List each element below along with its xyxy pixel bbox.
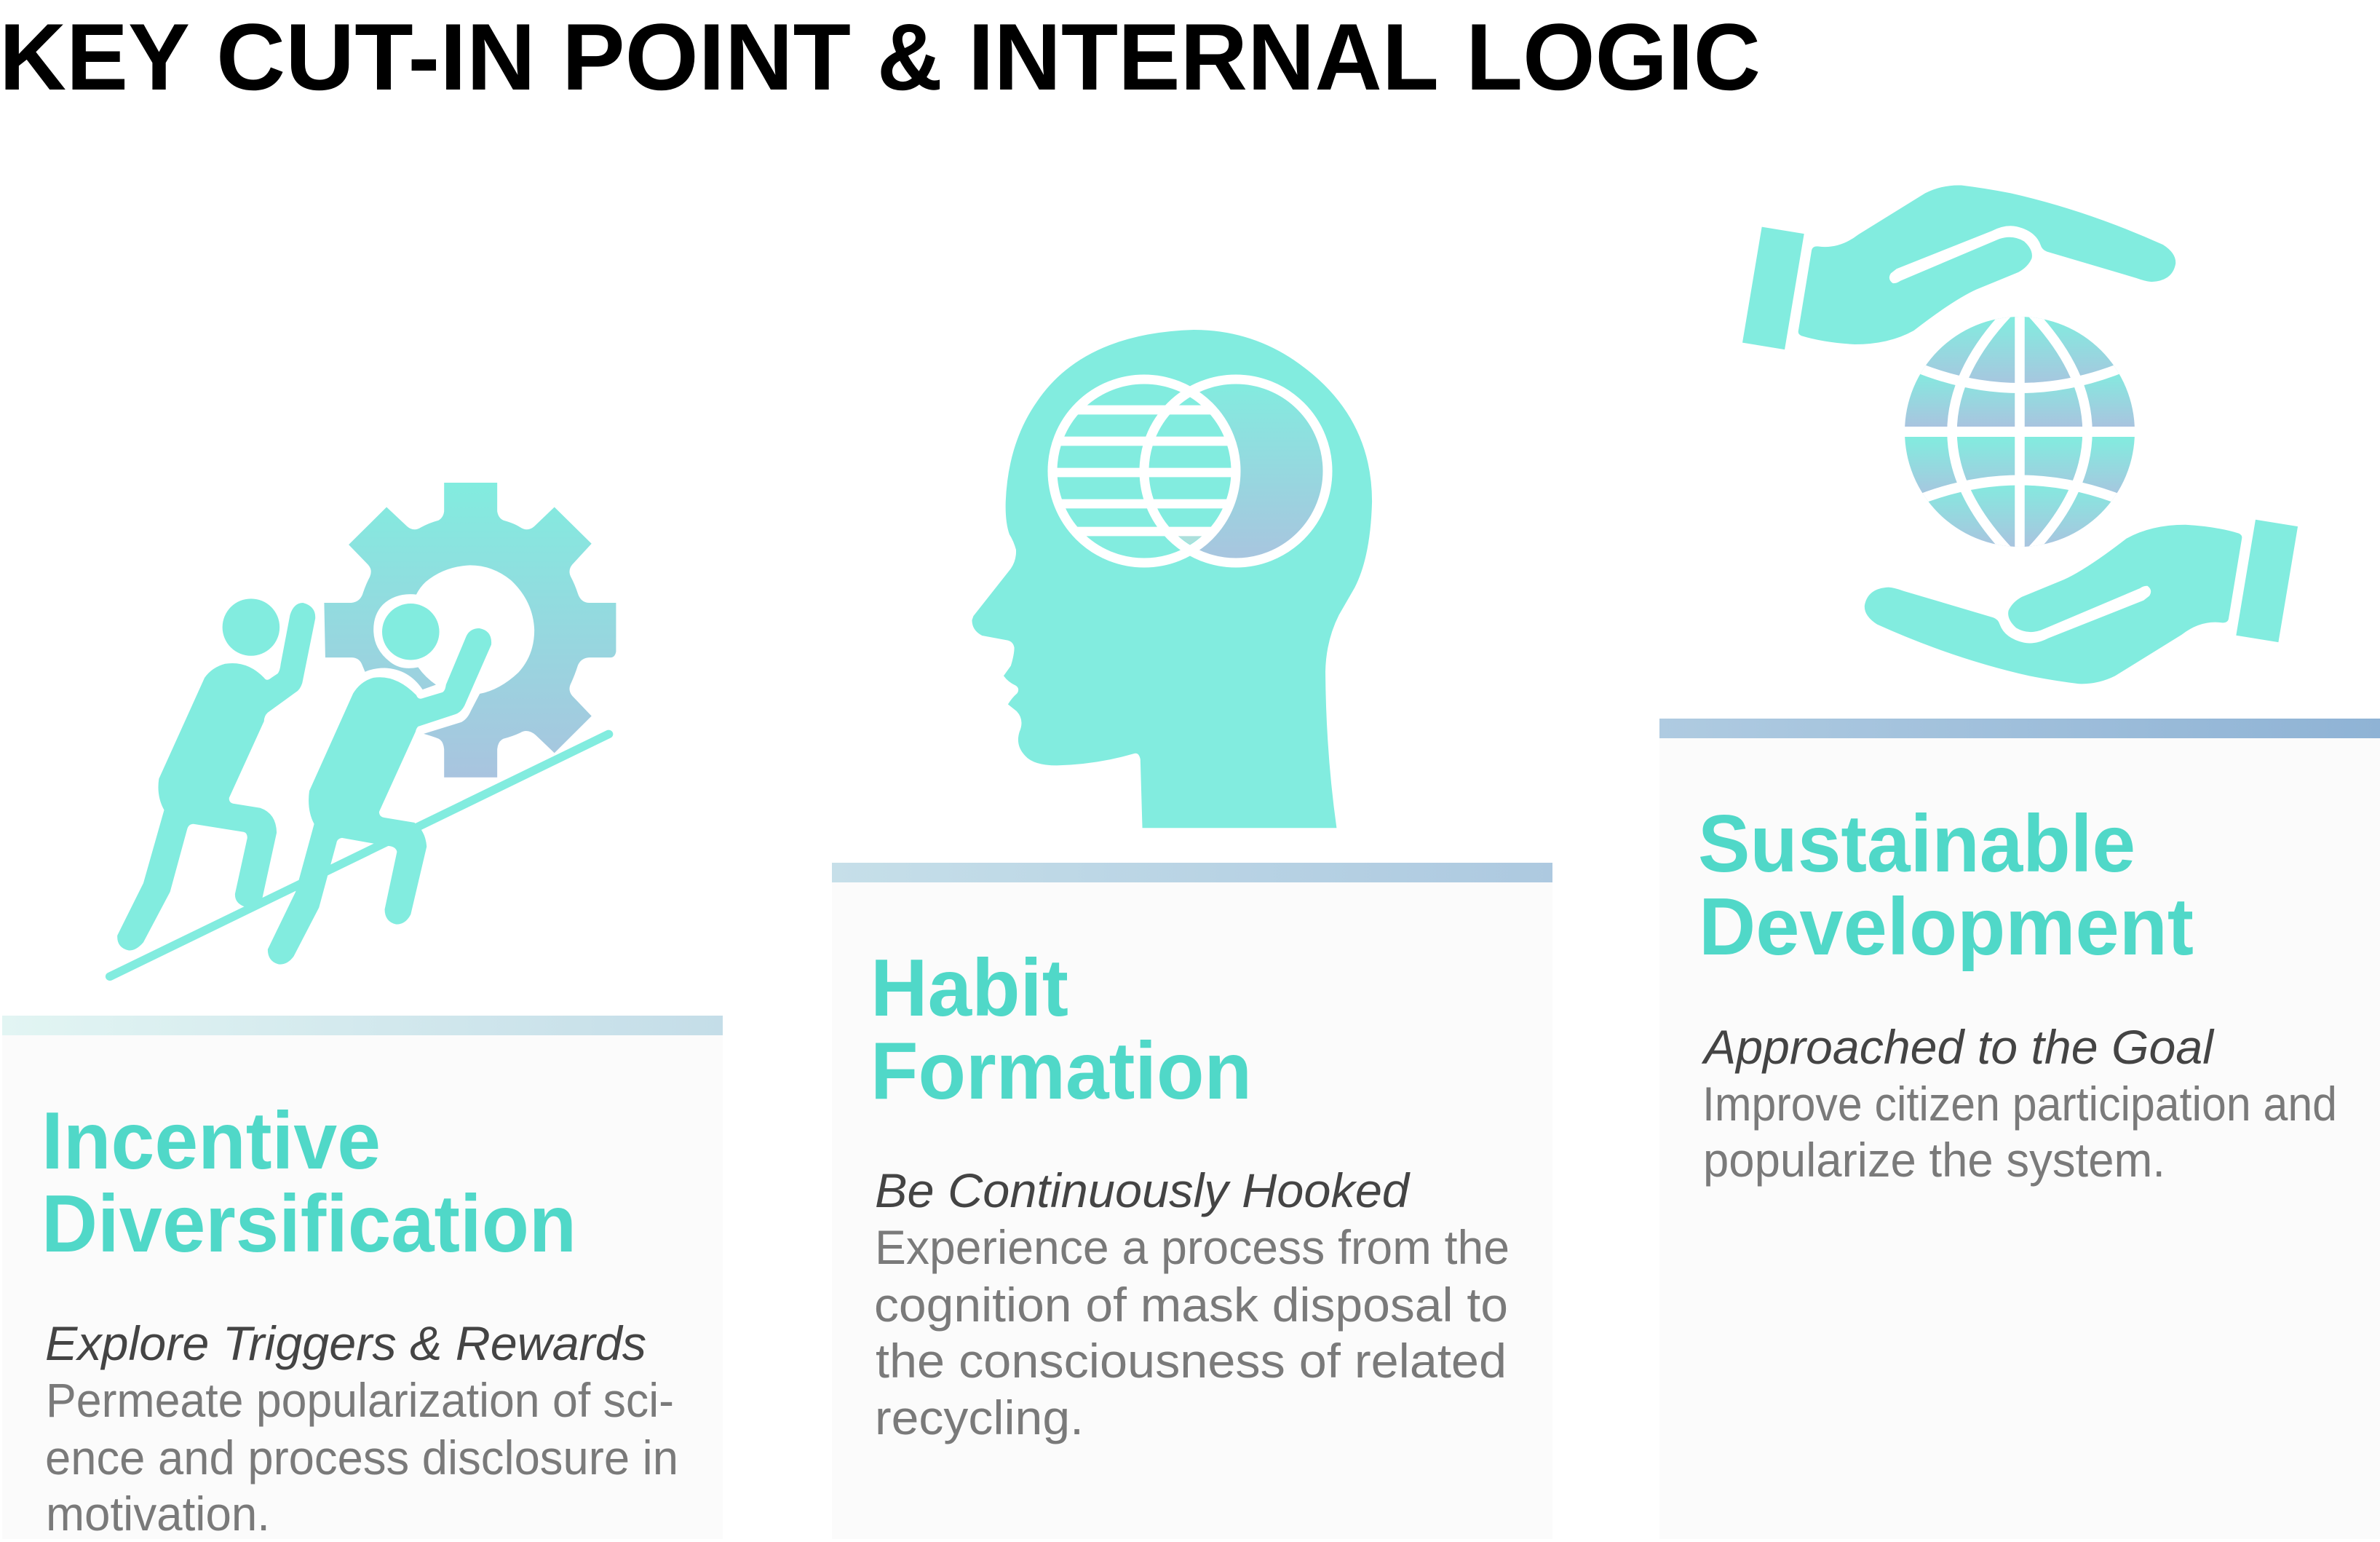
body text: ence and process disclosure in — [45, 1431, 678, 1484]
body text — [874, 1220, 1510, 1444]
gradient bar — [2, 1016, 723, 1035]
panel: Incentive Diversification — [2, 1016, 723, 1541]
panel background — [832, 882, 1552, 1539]
right circle outline — [1144, 379, 1328, 563]
rear figure — [117, 598, 315, 950]
body text: the consciousness of related — [876, 1334, 1507, 1388]
subheading: Approached to the Goal — [1701, 1020, 2215, 1074]
body text: Experience a process from the — [875, 1220, 1510, 1274]
body text: cognition of mask disposal to — [874, 1278, 1508, 1332]
globe — [1905, 317, 2135, 547]
panel background — [1659, 738, 2380, 1539]
icon: hands protecting a globe — [1742, 185, 2298, 684]
heading — [1698, 799, 2194, 972]
upper hand — [1742, 185, 2175, 349]
subheading: Be Continuously Hooked — [875, 1163, 1411, 1217]
title — [0, 4, 1761, 110]
panel background — [2, 1035, 723, 1539]
right circle with gradient — [1144, 379, 1328, 563]
panel: Sustainable Development — [1659, 719, 2380, 1539]
body text — [1702, 1077, 2337, 1187]
panel: Habit Formation — [832, 863, 1552, 1539]
heading: Development — [1699, 882, 2194, 972]
heading — [41, 1096, 576, 1269]
title: & — [877, 4, 943, 110]
icon: head with overlapping circles — [972, 330, 1372, 828]
body text: Permeate popularization of sci- — [46, 1373, 674, 1427]
title: INTERNAL — [968, 4, 1439, 110]
title: LOGIC — [1466, 4, 1761, 110]
lower hand — [1865, 520, 2298, 684]
body text: popularize the system. — [1703, 1133, 2165, 1187]
gear — [324, 483, 616, 778]
heading — [870, 943, 1252, 1116]
slope line — [110, 734, 608, 976]
heading: Sustainable — [1698, 799, 2135, 889]
body text — [45, 1373, 678, 1541]
front figure — [268, 604, 491, 965]
head silhouette — [972, 330, 1372, 828]
body text: Improve citizen participation and — [1702, 1077, 2337, 1131]
body text: motivation. — [46, 1487, 270, 1541]
gradient bar — [1659, 719, 2380, 738]
subheading: Explore Triggers & Rewards — [45, 1316, 646, 1370]
title: KEY — [0, 4, 190, 110]
icon: two figures pushing a gear up a slope — [110, 483, 616, 976]
body text: recycling. — [875, 1391, 1084, 1444]
heading: Formation — [870, 1026, 1252, 1116]
heading: Diversification — [41, 1179, 576, 1269]
heading: Incentive — [41, 1096, 381, 1186]
title: POINT — [562, 4, 851, 110]
heading: Habit — [870, 943, 1068, 1033]
gradient bar — [832, 863, 1552, 882]
title: CUT-IN — [216, 4, 536, 110]
left circle with stripes — [1048, 379, 1237, 563]
